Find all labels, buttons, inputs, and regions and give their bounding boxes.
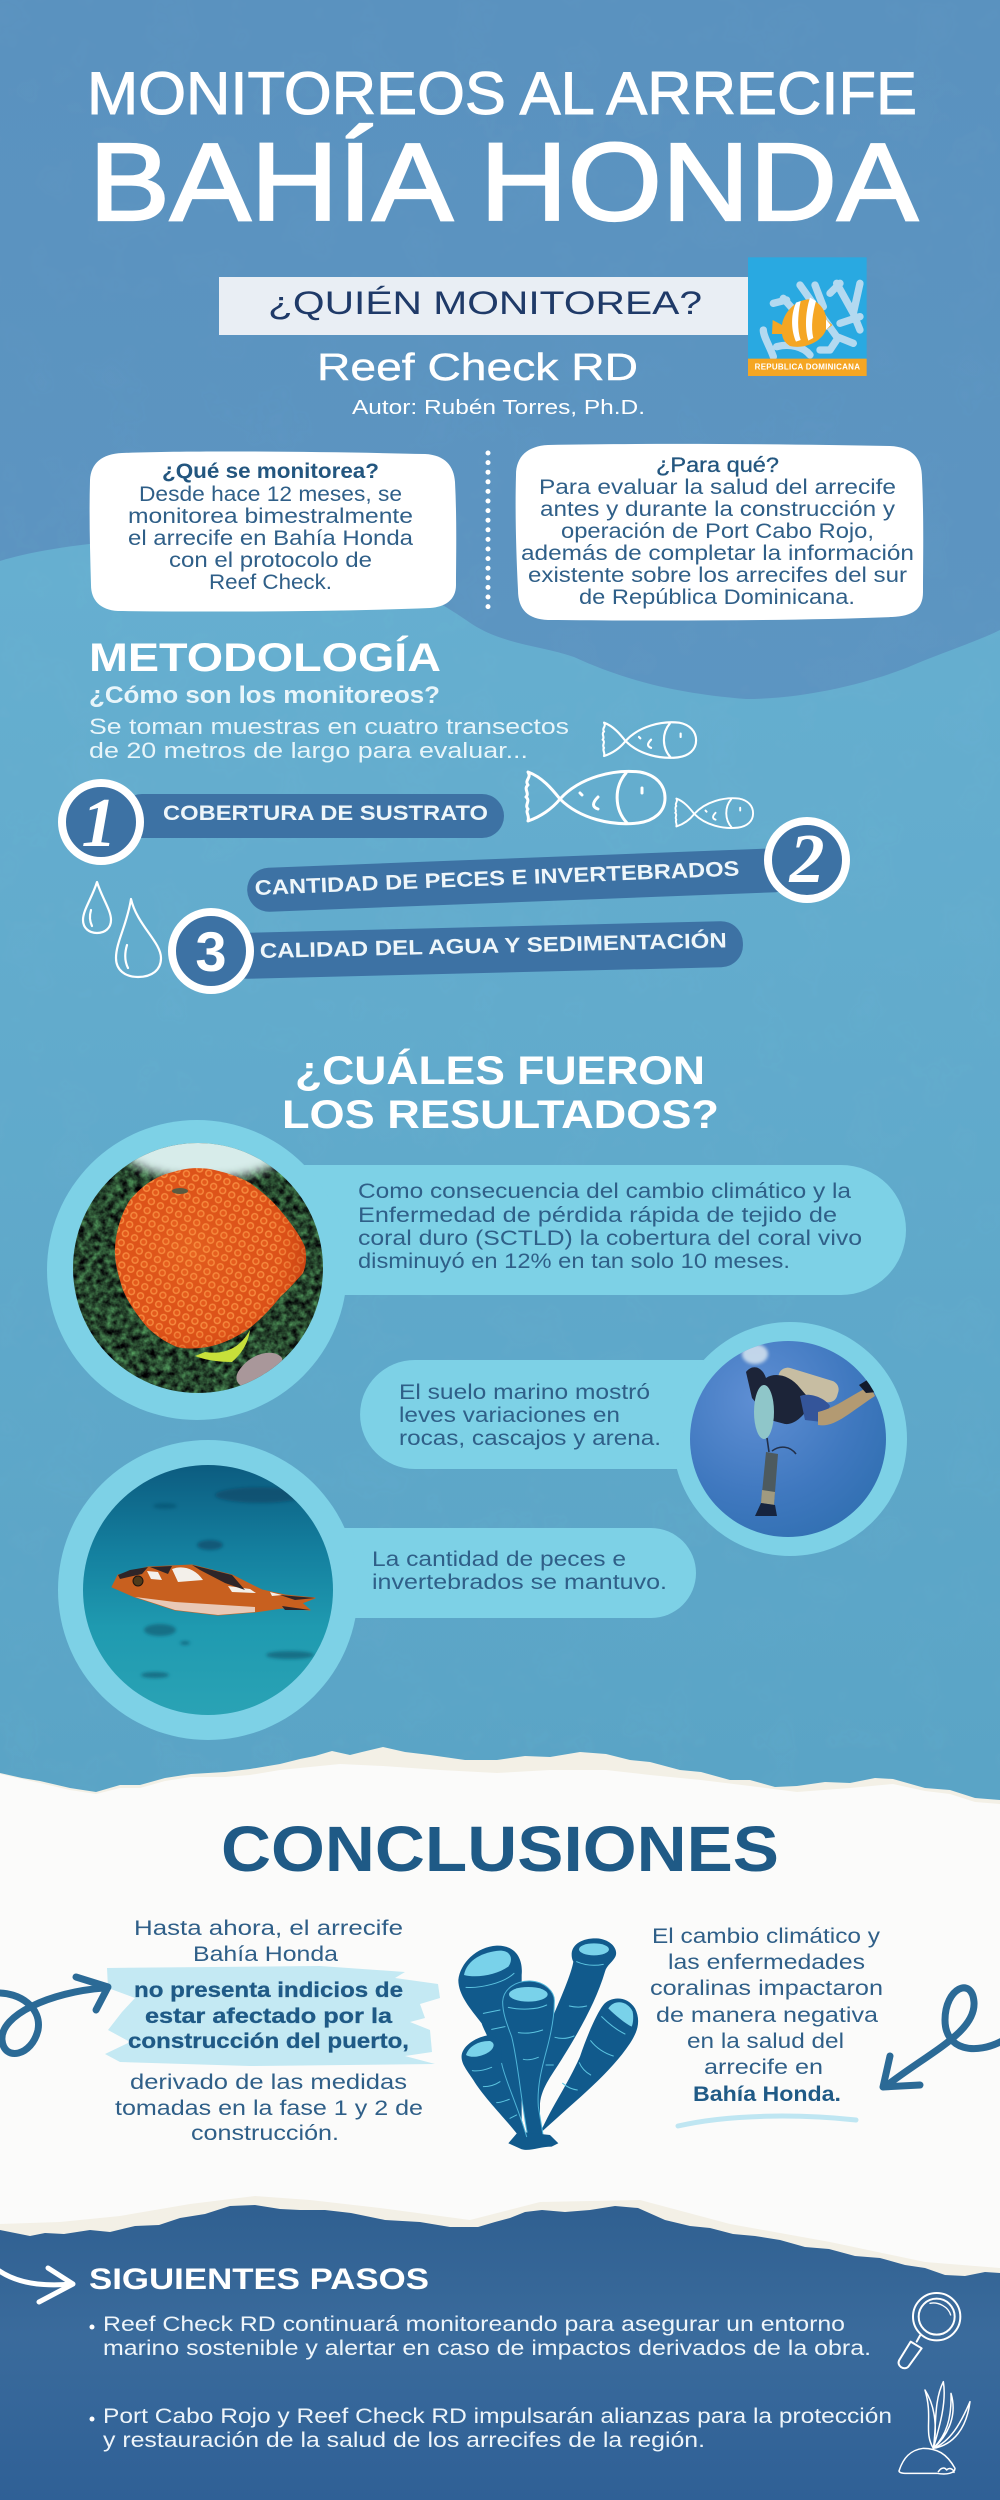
logo: Reef Check República Dominicana: REPUBLICA DOMINICANA (755, 362, 860, 371)
heading: siguientes pasos: SIGUIENTES PASOS (89, 2263, 429, 2296)
pill: step 3: CALIDAD DEL AGUA Y SEDIMENTACIÓN (260, 928, 727, 963)
text: fish result (372, 1548, 667, 1594)
text: right conclusion: El cambio climático y (652, 1925, 881, 1948)
arrow: siguientes pasos (0, 2268, 73, 2302)
text: methodology intro (89, 714, 569, 763)
panel: qué se monitorea: Reef Check. (209, 571, 332, 594)
text: seabed result: rocas, cascajos y arena. (399, 1427, 661, 1450)
pill: step 2 (246, 821, 846, 913)
text: next step 2: Port Cabo Rojo y Reef Check RD impulsarán alianzas para la protección (103, 2405, 892, 2428)
icon: magnifying glass (899, 2293, 960, 2368)
panel: qué se monitorea (90, 451, 456, 612)
text: methodology intro: de 20 metros de largo para evaluar... (89, 738, 528, 763)
background: upper blue paper (0, 0, 1000, 1100)
text: next step 1: Reef Check RD continuará monitoreando para asegurar un entorno (103, 2313, 845, 2336)
panel: para qué: Para evaluar la salud del arrecife (539, 476, 896, 499)
background: dark blue lower section (0, 2180, 1000, 2500)
icon: number 2: 2 (788, 821, 824, 898)
text: coral result: coral duro (SCTLD) la cobertura del coral vivo (358, 1227, 862, 1250)
icon: water drops (83, 882, 161, 977)
text: right conclusion: Bahía Honda. (693, 2083, 841, 2106)
pill: step 2: CANTIDAD DE PECES E INVERTEBRADOS (254, 858, 740, 900)
title: BAHÍA HONDA (89, 121, 919, 244)
text: right conclusion: arrecife en (704, 2056, 823, 2079)
icon: small fish right (675, 798, 753, 828)
text: right conclusion: de manera negativa (656, 2004, 878, 2027)
text: right conclusion: las enfermedades (668, 1951, 865, 1974)
arrow: left curl (0, 1977, 108, 2053)
text: left conclusion: construcción. (191, 2122, 339, 2145)
photo: orange coral (73, 1143, 323, 1393)
heading: resultados: ¿CUÁLES FUERON (295, 1048, 705, 1093)
icon: large fish (526, 771, 665, 824)
title (87, 60, 919, 244)
text: left conclusion: Hasta ahora, el arrecife (134, 1917, 403, 1940)
pill: step 3 (172, 912, 743, 990)
highlight brush (105, 1966, 440, 2066)
text: left conclusion: no presenta indicios de (134, 1979, 403, 2002)
pill: step 1: COBERTURA DE SUSTRATO (163, 802, 488, 825)
panel: result coral (47, 1111, 906, 1420)
icon: number 3 (172, 912, 250, 990)
panel: para qué: antes y durante la construcción y (540, 498, 896, 521)
banner: quién monitorea: ¿QUIÉN MONITOREA? (268, 285, 702, 321)
text: fish result: La cantidad de peces e (372, 1548, 626, 1571)
text: right conclusion (650, 1925, 883, 2106)
panel: result seabed (360, 1322, 907, 1556)
subheading: cómo son los monitoreos: ¿Cómo son los monitoreos? (89, 682, 440, 709)
panel: para qué: de República Dominicana. (579, 586, 855, 609)
underline stroke (678, 2116, 856, 2126)
icon: number 2 (768, 821, 846, 899)
panel: conclusiones torn paper (0, 1747, 1000, 2300)
panel: para qué (516, 444, 923, 621)
text: left conclusion: derivado de las medidas (130, 2071, 407, 2094)
author: Autor: Rubén Torres, Ph.D. (352, 397, 645, 419)
text: coral result: Enfermedad de pérdida rápida de tejido de (358, 1204, 837, 1227)
photo: diver (690, 1340, 886, 1538)
panel: para qué: además de completar la información (521, 542, 914, 565)
subtitle: Reef Check RD: Reef Check RD (317, 347, 638, 389)
panel: result fish (58, 1440, 696, 1740)
panel: qué se monitorea: ¿Qué se monitorea? (162, 460, 379, 483)
text: coral result: Como consecuencia del cambio climático y la (358, 1180, 851, 1203)
text: right conclusion: en la salud del (687, 2030, 844, 2053)
title: MONITOREOS AL ARRECIFE (87, 60, 917, 127)
icon: number 1 (62, 783, 140, 862)
panel: para qué: existente sobre los arrecifes del sur (528, 564, 907, 587)
icon: tube coral (458, 1938, 638, 2150)
text: left conclusion: tomadas en la fase 1 y 2 de (115, 2097, 423, 2120)
heading: metodología: METODOLOGÍA (89, 635, 441, 680)
text: left conclusion: construcción del puerto, (128, 2030, 409, 2053)
text: left conclusion: estar afectado por la (145, 2005, 392, 2028)
text: left conclusion (115, 1917, 423, 2145)
panel: qué se monitorea: monitorea bimestralmente (128, 505, 413, 528)
heading: resultados: LOS RESULTADOS? (282, 1093, 719, 1137)
divider: dotted line (486, 453, 490, 608)
panel: para qué: operación de Port Cabo Rojo, (561, 520, 874, 543)
panel: qué se monitorea: el arrecife en Bahía Honda (128, 527, 413, 550)
icon: seaweed on rock (899, 2382, 970, 2474)
text: seabed result: El suelo marino mostró (399, 1381, 650, 1404)
text: left conclusion: Bahía Honda (193, 1943, 338, 1966)
arrow: right curl (883, 1988, 1000, 2087)
background: light blue wave (0, 539, 1000, 1900)
panel: qué se monitorea: Desde hace 12 meses, se (139, 483, 402, 506)
text: next step 2: y restauración de la salud de los arrecifes de la región. (103, 2429, 705, 2452)
text: coral result: disminuyó en 12% en tan solo 10 meses. (358, 1250, 790, 1273)
text: seabed result (399, 1381, 661, 1450)
text: seabed result: leves variaciones en (399, 1404, 620, 1427)
pill: step 1 (62, 783, 504, 862)
heading: resultados (282, 1048, 719, 1137)
text: next step 2 (90, 2405, 892, 2452)
text: next step 1: marino sostenible y alertar en caso de impactos derivados de la obra. (103, 2337, 871, 2360)
text: coral result (358, 1180, 862, 1273)
icon: number 3: 3 (195, 920, 227, 983)
photo: fish (83, 1465, 333, 1715)
heading: conclusiones: CONCLUSIONES (221, 1813, 779, 1885)
panel: para qué: ¿Para qué? (656, 454, 779, 477)
icon: number 1: 1 (82, 785, 116, 862)
logo: Reef Check República Dominicana (748, 257, 867, 376)
panel: qué se monitorea: con el protocolo de (169, 549, 372, 572)
banner: quién monitorea (219, 277, 748, 335)
text: right conclusion: coralinas impactaron (650, 1977, 883, 2000)
icon: small fish top (603, 722, 696, 758)
text: methodology intro: Se toman muestras en cuatro transectos (89, 714, 569, 739)
text: next step 1 (90, 2313, 871, 2360)
text: fish result: invertebrados se mantuvo. (372, 1571, 667, 1594)
